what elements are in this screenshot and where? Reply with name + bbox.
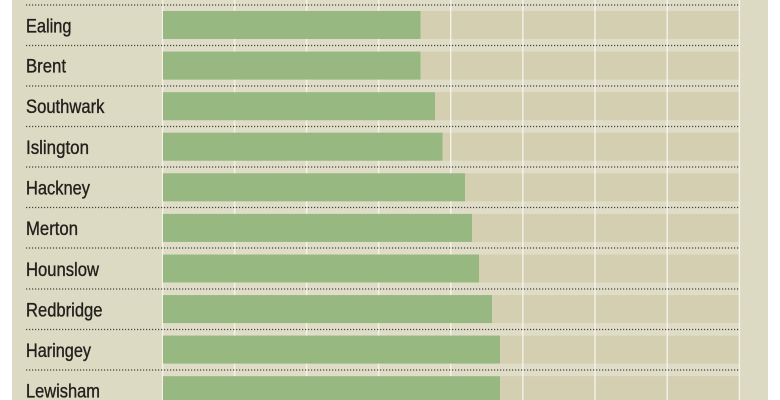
row: Ealing xyxy=(26,11,420,39)
row: Hackney: Hackney xyxy=(26,178,90,200)
row: Redbridge: Redbridge xyxy=(26,300,102,322)
row: Southwark xyxy=(26,92,435,120)
row: Islington: Islington xyxy=(26,137,89,159)
row: Southwark: Southwark xyxy=(26,96,105,118)
row: Brent: Brent xyxy=(26,56,66,78)
row: Islington xyxy=(26,133,442,161)
row: Lewisham xyxy=(26,376,500,400)
row: Merton: Merton xyxy=(26,218,78,240)
row: Redbridge xyxy=(26,295,492,323)
row: Hounslow: Hounslow xyxy=(26,259,100,281)
row: Merton xyxy=(26,214,472,242)
row: Hounslow xyxy=(26,254,479,282)
row: Hackney xyxy=(26,173,465,201)
row: Haringey xyxy=(26,336,500,364)
row: Ealing: Ealing xyxy=(26,16,72,38)
row: Haringey: Haringey xyxy=(26,340,91,362)
row: Brent xyxy=(26,52,420,80)
